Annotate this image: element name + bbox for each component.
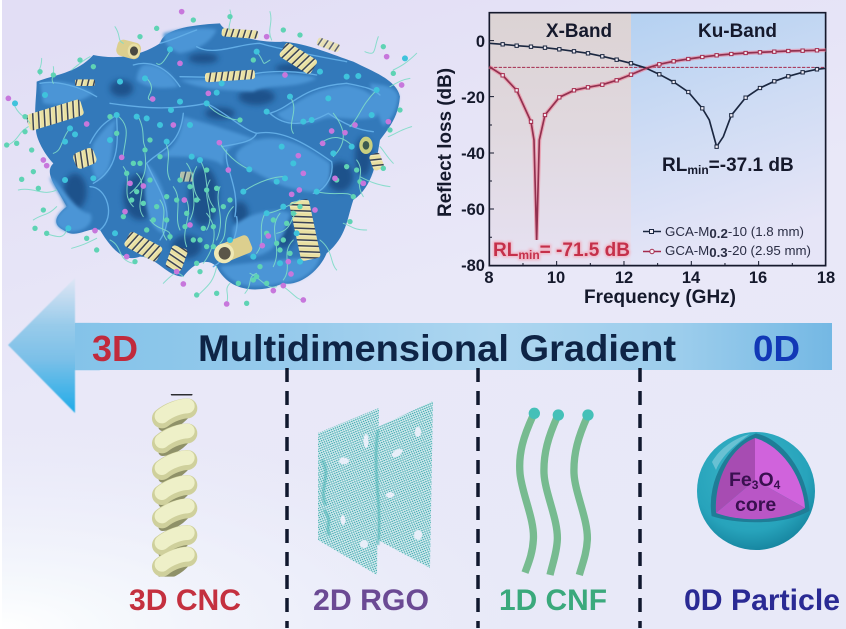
legend: 0.3 [709, 246, 728, 260]
annotation: red curve minimum: min [518, 248, 540, 262]
annotation: red curve minimum: min [518, 248, 540, 262]
icon: core-shell sphere [697, 432, 815, 550]
x axis tick labels: 18 [817, 269, 835, 287]
composite aerogel illustration [5, 10, 417, 304]
annotation: red curve minimum: = -71.5 dB [540, 240, 630, 261]
annotation: red curve minimum: = -71.5 dB [540, 240, 630, 261]
y axis tick labels: -80 [461, 257, 485, 275]
band label: Ku-Band: Ku-Band [698, 21, 777, 42]
column dividers [287, 368, 640, 628]
annotation: black curve minimum: RL [662, 155, 687, 176]
annotation: black curve minimum: min [687, 163, 709, 177]
annotation: black curve minimum: =-37.1 dB [709, 155, 794, 176]
graphene sheet body [35, 23, 400, 289]
label: Fe3O4 core: core [735, 494, 776, 516]
label: 3D CNC: 3D CNC [129, 584, 241, 617]
label: Fe3O4 core: 4 [774, 478, 781, 492]
label: Fe3O4 core [729, 469, 781, 516]
reflection loss chart [435, 13, 835, 308]
x axis tick labels: 8 [484, 269, 494, 287]
component: 3D carbon nanocoil [129, 395, 241, 617]
annotation: red curve minimum: RL [493, 240, 518, 261]
arrow label: 3D: 3D [92, 328, 138, 369]
chart curves [489, 13, 826, 266]
carbon nanocoils [25, 28, 385, 272]
nanofibers [5, 10, 417, 303]
y axis tick labels: -40 [461, 145, 485, 163]
label: 1D CNF: 1D CNF [499, 584, 607, 617]
x axis tick labels: 16 [749, 269, 767, 287]
arrow label: 0D: 0D [753, 328, 800, 369]
legend: GCA-M [665, 225, 707, 239]
y axis tick labels: 0 [476, 33, 485, 51]
label: Fe3O4 core: 3 [752, 478, 759, 492]
component: 2D reduced graphene oxide [313, 401, 433, 617]
x axis tick labels: 10 [547, 269, 565, 287]
y axis tick labels: -20 [461, 89, 485, 107]
x axis tick labels: 12 [615, 269, 633, 287]
y axis tick labels: -60 [461, 201, 485, 219]
label: 0D Particle: 0D Particle [684, 584, 840, 617]
legend: 0.2 [709, 227, 728, 241]
y axis tick labels [461, 33, 485, 275]
component: 0D particle [684, 432, 840, 617]
arrow label: multidimensional gradient: Multidimensional Gradient [198, 327, 677, 369]
legend: -20 (2.95 mm) [728, 244, 811, 258]
y axis title: Reflect loss (dB) [435, 68, 456, 217]
legend: -10 (1.8 mm) [728, 225, 804, 239]
icon: three nanofibers [520, 408, 594, 575]
spring body [162, 395, 192, 575]
component: 1D carbon nanofiber [499, 408, 607, 617]
icon: mesh sheets [318, 401, 433, 575]
label: Fe3O4 core: Fe [729, 469, 752, 491]
band backgrounds [489, 13, 826, 266]
legend [643, 225, 811, 260]
annotation: red curve minimum: RL [493, 240, 518, 261]
icon: coil spring [162, 395, 192, 575]
band label: X-Band: X-Band [546, 21, 612, 42]
label: Fe3O4 core: O [758, 469, 774, 491]
nanoparticles [7, 12, 405, 304]
legend: GCA-M [665, 244, 707, 258]
label: 2D RGO: 2D RGO [313, 584, 429, 617]
gradient arrow [8, 278, 832, 413]
x axis title: Frequency (GHz) [584, 287, 736, 308]
x axis tick labels [484, 269, 835, 287]
annotation: red curve minimum [493, 240, 630, 262]
x axis tick labels: 14 [682, 269, 701, 287]
